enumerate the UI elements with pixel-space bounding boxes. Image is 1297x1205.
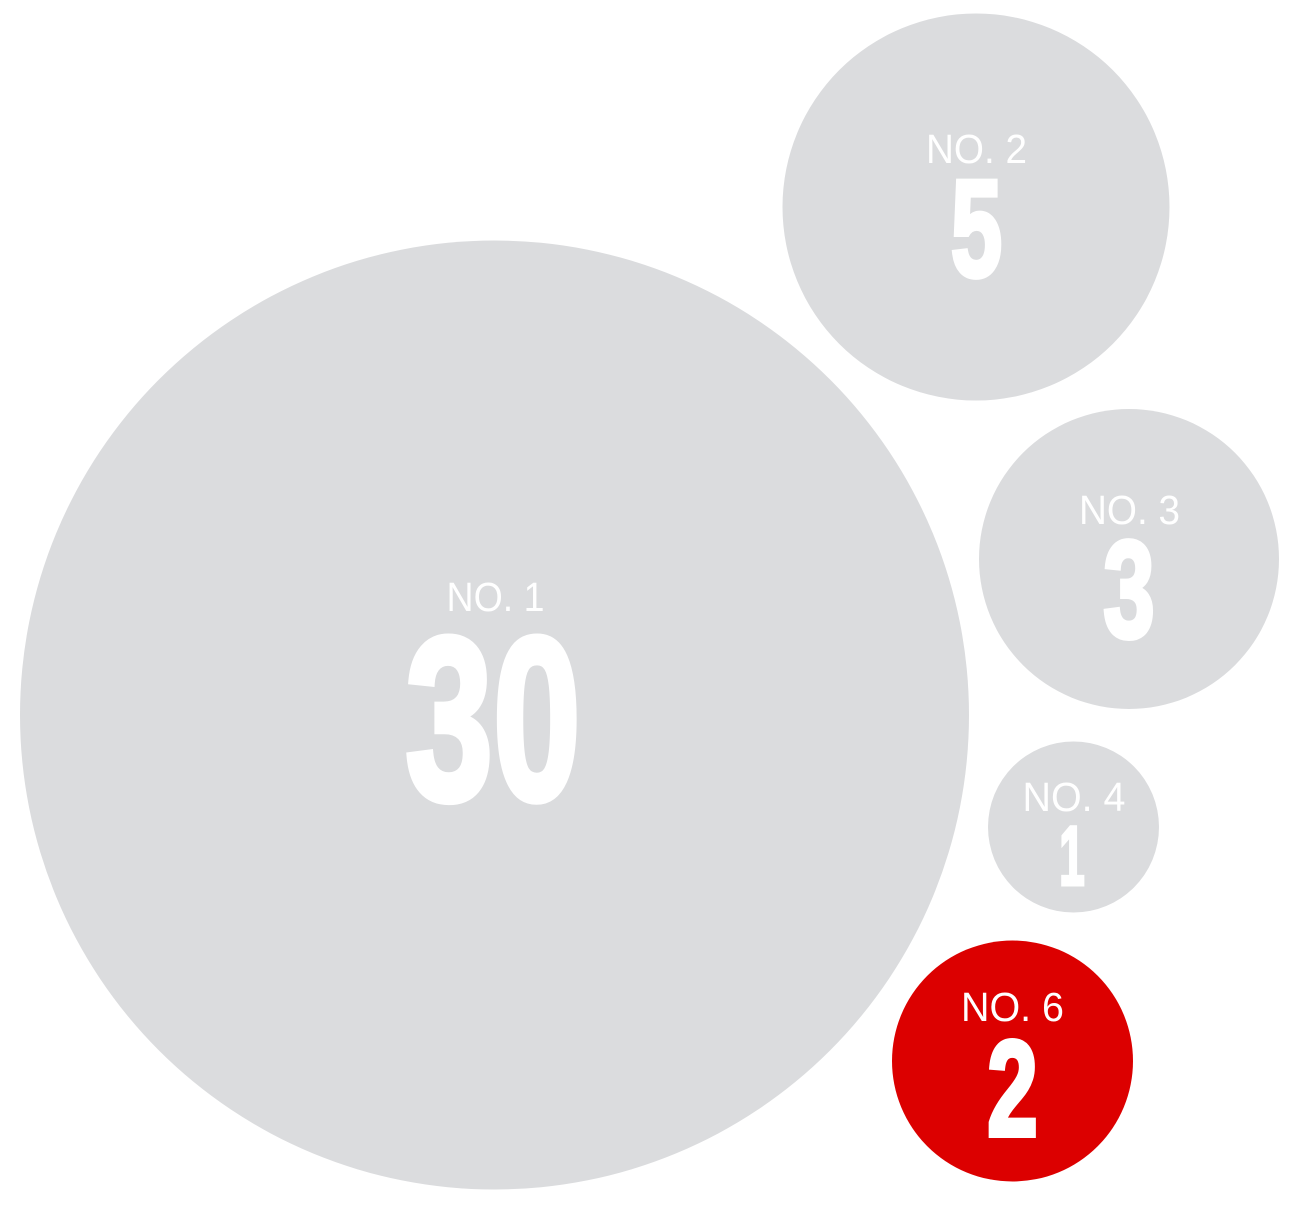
label: No. 6: NO. 6 <box>961 984 1064 1030</box>
value: 5: 5 <box>951 151 1002 305</box>
value: 2: 2 <box>987 1012 1038 1165</box>
bubble: No. 2 <box>782 14 1170 400</box>
value: 3: 3 <box>1103 512 1155 666</box>
bubble: No. 6 (highlighted) <box>892 940 1133 1182</box>
bubble: No. 3 <box>979 409 1279 709</box>
value: 1: 1 <box>1059 811 1085 904</box>
label: No. 4: NO. 4 <box>1022 774 1126 820</box>
label: No. 2: NO. 2 <box>926 126 1027 172</box>
value: 30: 30 <box>405 590 581 849</box>
bubble: No. 4 <box>988 742 1159 912</box>
label: No. 1: NO. 1 <box>446 574 544 620</box>
label: No. 3: NO. 3 <box>1079 487 1180 533</box>
bubble: No. 1 <box>20 240 969 1190</box>
